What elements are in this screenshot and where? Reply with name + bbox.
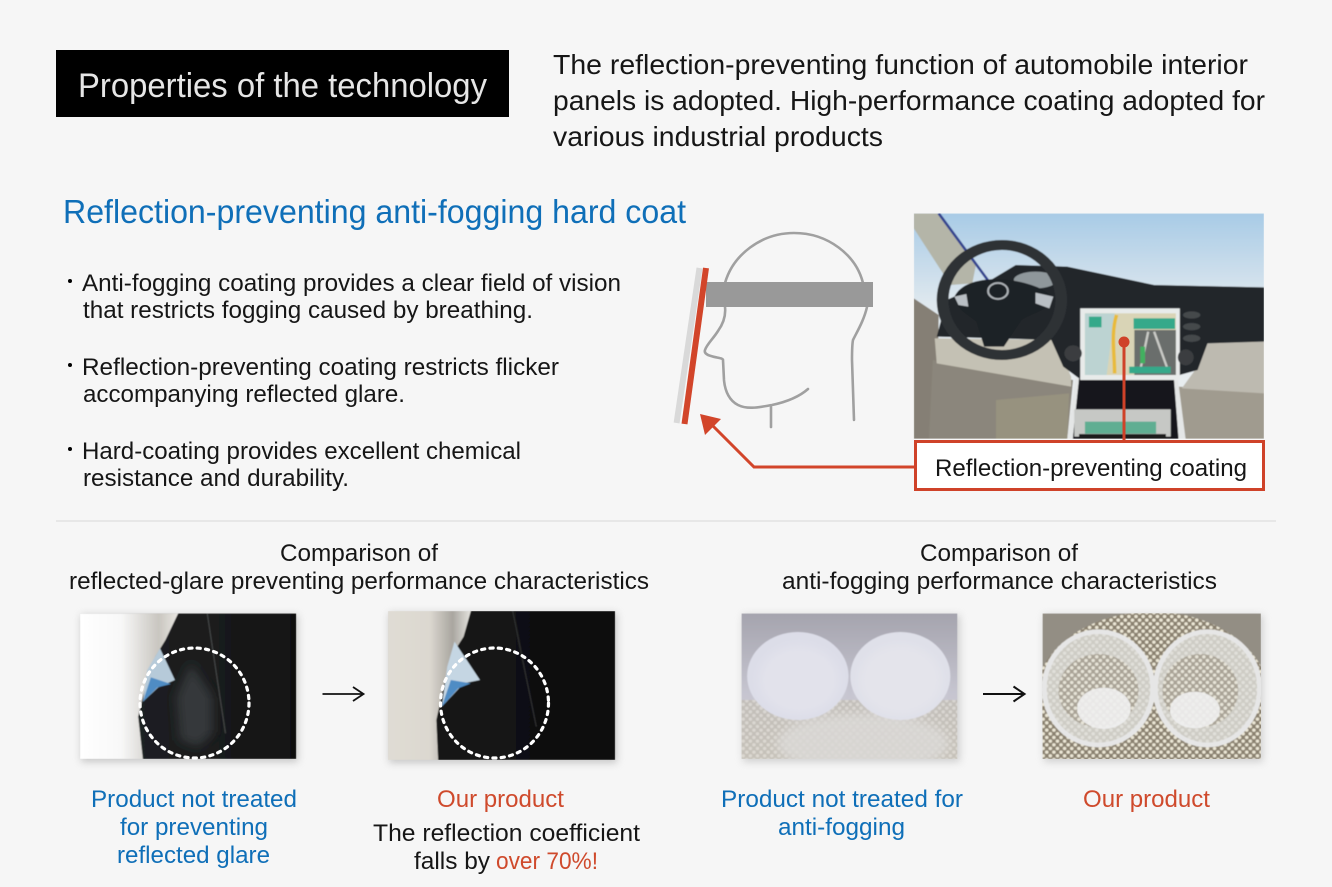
shield coating	[684, 268, 706, 424]
photo: untreated product with glare	[80, 613, 298, 762]
bullet list	[68, 270, 621, 492]
head band	[706, 282, 873, 307]
bullet: reflection-preventing: Reflection-preventing coating restricts flicker	[82, 354, 559, 381]
title banner: Properties of the technology	[78, 67, 487, 105]
photo: untreated fogged cups	[741, 613, 960, 773]
shield base layer	[677, 268, 700, 423]
intro text: various industrial products	[553, 121, 883, 152]
arrow: fogging before to after	[983, 686, 1024, 702]
photo: treated clear cups	[1041, 612, 1266, 765]
bullet: reflection-preventing	[68, 354, 559, 408]
intro text: The reflection-preventing function of automobile interior	[553, 49, 1248, 80]
heading: anti-fogging comparison: Comparison of	[920, 540, 1078, 567]
caption: untreated for glare: Product not treated	[91, 786, 297, 813]
highlight circle	[440, 648, 548, 758]
title banner	[56, 50, 509, 117]
bullet: hard-coating: Hard-coating provides excellent chemical	[82, 438, 521, 465]
section heading: Reflection-preventing anti-fogging hard coat	[63, 193, 686, 230]
caption: untreated for fogging: Product not treated for	[721, 786, 963, 813]
caption: untreated for glare: reflected glare	[117, 842, 270, 869]
caption: untreated for glare	[91, 786, 297, 869]
caption: our product, reflection result: falls by	[414, 848, 490, 875]
photo: car interior with navigation screen	[914, 213, 1264, 440]
intro text: panels is adopted. High-performance coating adopted for	[553, 85, 1265, 116]
caption: our product, reflection result: over 70%!	[496, 848, 598, 875]
intro text	[553, 49, 1265, 152]
arrow: glare before to after	[322, 687, 364, 701]
bullet: anti-fogging	[68, 270, 621, 324]
caption: untreated for fogging	[721, 786, 963, 841]
heading: glare comparison: Comparison of	[280, 540, 438, 567]
photo: treated product without glare	[388, 611, 617, 763]
heading: anti-fogging comparison	[782, 540, 1217, 595]
callout: reflection-preventing coating label: Reflection-preventing coating	[935, 455, 1247, 482]
head outline	[705, 233, 867, 427]
bullet: anti-fogging: Anti-fogging coating provides a clear field of vision	[82, 270, 621, 297]
callout: reflection-preventing coating label	[916, 442, 1264, 490]
caption: untreated for glare: for preventing	[120, 814, 268, 841]
caption: our product, fogging: Our product	[1083, 786, 1210, 813]
bullet: hard-coating: resistance and durability.	[83, 465, 349, 492]
callout: leader line and dot	[1118, 336, 1130, 441]
caption: our product, reflection result	[373, 786, 640, 875]
heading: glare comparison	[69, 540, 649, 595]
heading: glare comparison: reflected-glare preventing performance characteristics	[69, 568, 649, 595]
heading: anti-fogging comparison: anti-fogging performance characteristics	[782, 568, 1217, 595]
diagram: head with face shield	[677, 233, 873, 427]
highlight circle	[140, 648, 249, 758]
arrow: coating to shield	[700, 414, 914, 467]
caption: our product, reflection result: Our product	[437, 786, 564, 813]
caption: our product, reflection result: The reflection coefficient	[373, 820, 640, 847]
bullet: anti-fogging: that restricts fogging caused by breathing.	[83, 297, 533, 324]
bullet: reflection-preventing: accompanying reflected glare.	[83, 381, 405, 408]
bullet: hard-coating	[68, 438, 521, 492]
caption: untreated for fogging: anti-fogging	[778, 814, 905, 841]
